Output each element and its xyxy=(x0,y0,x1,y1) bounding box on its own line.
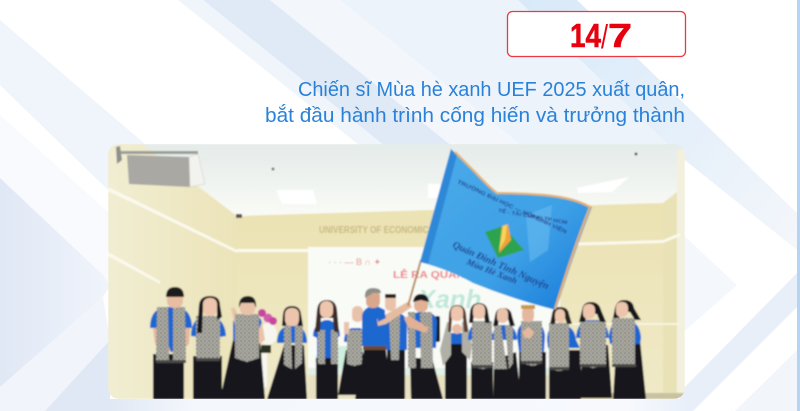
photo: flag ceremony xyxy=(108,144,685,399)
flowers xyxy=(258,309,277,387)
headline: bắt đầu hành trình cống hiến và trưởng thành xyxy=(265,104,685,127)
student 13 xyxy=(547,307,581,399)
stage screen: · · · — B ∩ ✦ xyxy=(328,257,381,267)
flag xyxy=(408,149,592,310)
man waving xyxy=(355,288,412,399)
student 6 xyxy=(336,306,364,396)
student 4 xyxy=(267,306,307,399)
wall lettering: UNIVERSITY OF ECONOMICS xyxy=(319,225,434,236)
flag bearer xyxy=(404,294,443,399)
date badge: 14 xyxy=(570,17,602,54)
flag: Mùa Hè Xanh xyxy=(464,256,519,286)
room interior xyxy=(108,144,685,399)
student 12 xyxy=(517,305,546,399)
student 3 xyxy=(220,296,265,399)
stage screen: Xanh xyxy=(416,284,482,314)
student 14 xyxy=(576,302,612,398)
student behind xyxy=(385,294,407,399)
student 1 xyxy=(150,287,192,399)
student 11 xyxy=(492,308,521,399)
flag: TRƯỜNG ĐẠI HỌC — HỘI SINH VIÊN xyxy=(456,178,568,236)
date badge: / xyxy=(601,18,609,55)
date badge: 7 xyxy=(608,17,632,54)
student 15 xyxy=(609,300,646,399)
speaker xyxy=(116,146,205,187)
date badge xyxy=(508,12,686,56)
student 5 xyxy=(313,300,340,399)
stage screen: LỄ RA QUÂN xyxy=(393,268,465,281)
headline: Chiến sĩ Mùa hè xanh UEF 2025 xuất quân, xyxy=(298,79,685,101)
flag: Quán Đình Tình Nguyện xyxy=(451,240,551,292)
student 9 xyxy=(440,305,472,399)
headline xyxy=(265,79,685,127)
student 2 xyxy=(191,296,226,399)
student 10 xyxy=(468,303,493,399)
students xyxy=(150,287,646,399)
stage screen xyxy=(308,247,560,399)
flag: TẾ - TÀI CHÍNH TP HCM xyxy=(498,206,568,226)
